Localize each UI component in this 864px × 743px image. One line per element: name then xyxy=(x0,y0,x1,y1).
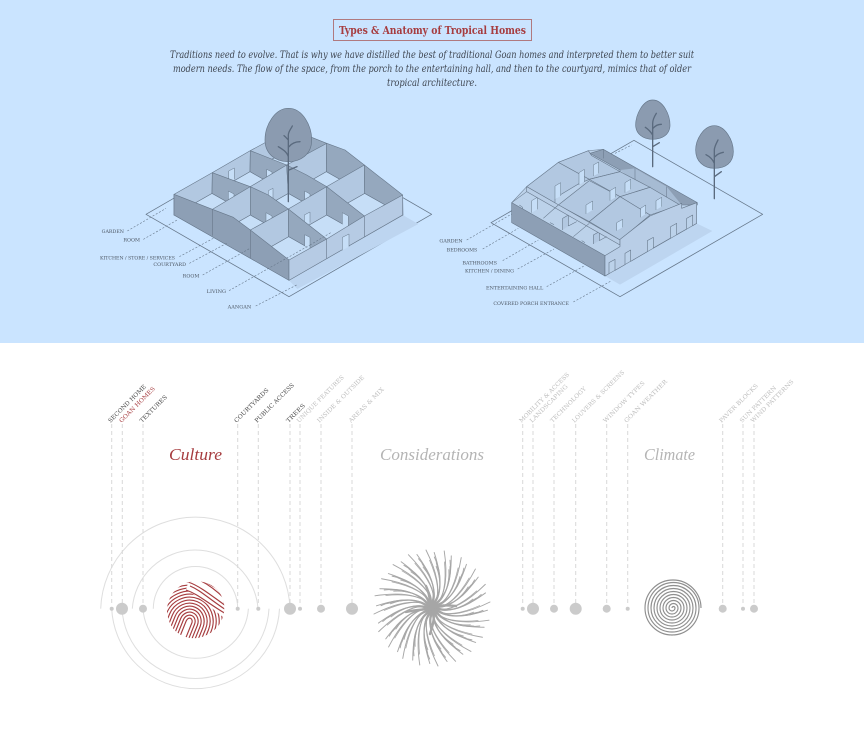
rooms and walls xyxy=(174,130,403,280)
rotated topic labels: PAVER BLOCKS xyxy=(719,383,760,424)
intro text block xyxy=(170,50,694,89)
icon: fingerprint xyxy=(167,582,224,638)
labels with leader lines: KITCHEN / STORE / SERVICES xyxy=(100,255,175,261)
labels with leader lines: ROOM xyxy=(183,273,200,279)
labels with leader lines xyxy=(100,208,331,310)
heading: climate: Climate xyxy=(644,445,695,464)
rotated topic labels: GOAN WEATHER xyxy=(624,379,669,424)
doors and openings xyxy=(532,162,662,244)
cross beam xyxy=(527,187,620,245)
labels with leader lines: COVERED PORCH ENTRANCE xyxy=(493,301,569,307)
labels with leader lines: LIVING xyxy=(207,289,226,295)
labels with leader lines: BATHROOMS xyxy=(462,260,497,266)
icon: spiral xyxy=(645,580,701,635)
icon: radial burst xyxy=(374,550,490,666)
labels with leader lines xyxy=(439,145,632,307)
tree xyxy=(265,108,312,202)
rotated topic labels: TREES xyxy=(286,403,307,424)
rotated topic labels: PUBLIC ACCESS xyxy=(254,383,296,424)
intro text block: modern needs. The flow of the space, from the porch to the entertaining hall, and then to the courtyard, mimics that of older xyxy=(173,64,692,75)
labels with leader lines: KITCHEN / DINING xyxy=(465,269,514,275)
labels with leader lines: ENTERTAINING HALL xyxy=(486,286,543,292)
rotated topic labels: SUN PATTERN xyxy=(739,386,778,424)
outer front wall xyxy=(289,195,403,280)
trees xyxy=(636,100,733,199)
outer left wall xyxy=(512,203,605,276)
rotated topic labels: LANDSCAPING xyxy=(529,384,570,424)
outer front wall with openings xyxy=(605,203,697,276)
back service bay xyxy=(590,149,697,205)
dashed connector lines xyxy=(112,424,754,606)
timeline dots xyxy=(110,603,758,615)
heading: culture: Culture xyxy=(169,445,222,464)
rotated topic labels: UNIQUE FEATURES xyxy=(296,375,346,424)
title: Types & Anatomy of Tropical Homes xyxy=(339,24,526,37)
intro text block: Traditions need to evolve. That is why we have distilled the best of traditional Goan homes and interpreted them to better suit xyxy=(170,50,694,61)
rotated topic labels: MOBILITY & ACCESS xyxy=(519,372,571,424)
house shadow xyxy=(289,215,418,289)
title xyxy=(334,20,532,40)
rotated topic labels: COURTYARDS xyxy=(234,388,270,424)
rotated topic labels: INSIDE & OUTSIDE xyxy=(317,375,366,424)
rotated topic labels: AREAS & MIX xyxy=(347,386,386,425)
orbit arcs around culture xyxy=(101,517,290,689)
panel: tropical homes header background xyxy=(0,0,864,343)
ground plane xyxy=(146,132,432,297)
labels with leader lines: GARDEN xyxy=(102,229,124,235)
rotated topic labels: WINDOW TYPES xyxy=(603,381,647,424)
isometric diagram: courtyard home xyxy=(100,108,432,310)
labels with leader lines: ROOM xyxy=(123,238,140,244)
labels with leader lines: GARDEN xyxy=(439,238,463,244)
outer left wall xyxy=(174,194,289,280)
labels with leader lines: BEDROOMS xyxy=(447,247,477,253)
roof and wall panels xyxy=(527,151,680,240)
entry door xyxy=(342,234,349,250)
labels with leader lines: AANGAN xyxy=(227,304,251,310)
heading: considerations: Considerations xyxy=(380,445,484,464)
house shadow xyxy=(605,223,712,285)
isometric diagram: hall home xyxy=(439,100,763,307)
rotated topic labels: WIND PATTERNS xyxy=(750,379,795,424)
rotated topic labels: GOAN HOMES xyxy=(119,386,157,424)
labels with leader lines: COURTYARD xyxy=(153,262,186,268)
rotated topic labels: TEXTURES xyxy=(139,395,169,424)
rotated topic labels: LOUVERS & SCREENS xyxy=(572,370,626,424)
rotated topic labels: TECHNOLOGY xyxy=(550,386,588,424)
intro text block: tropical architecture. xyxy=(387,78,477,89)
ground plane xyxy=(491,140,763,297)
rotated topic labels: SECOND HOME xyxy=(108,384,148,424)
rotated topic labels xyxy=(108,370,795,425)
house floor footprint xyxy=(512,149,697,276)
